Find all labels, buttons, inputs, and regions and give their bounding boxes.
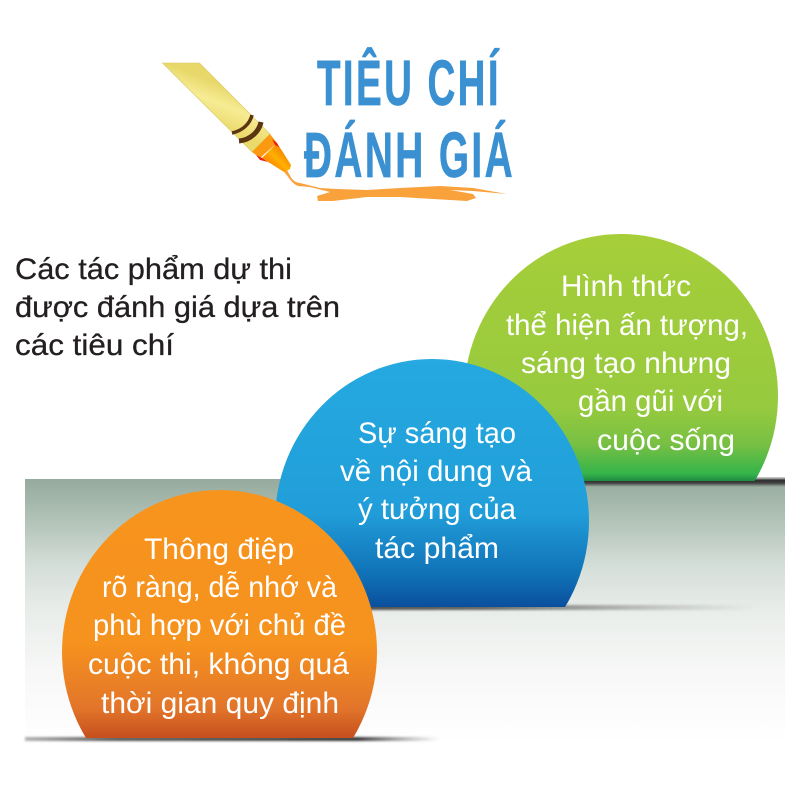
intro text: các tiêu chí [15, 329, 175, 362]
green criterion text: cuộc sống [597, 424, 735, 457]
blue criterion text: tác phẩm [375, 532, 499, 565]
orange criterion text: Thông điệp [144, 533, 294, 566]
green criterion text: Hình thức [561, 270, 691, 303]
orange criterion text: cuộc thi, không quá [88, 648, 349, 681]
orange ground shadow [25, 737, 440, 741]
blue criterion text: Sự sáng tạo [358, 417, 516, 450]
crayon tip red edges [256, 139, 279, 162]
green criterion text: sáng tạo nhưng [521, 347, 731, 380]
title: TIÊU CHÍ [317, 46, 501, 119]
green ground shadow [540, 477, 785, 487]
green criterion text: gần gũi với [578, 385, 723, 418]
crayon tip [262, 143, 291, 172]
green criterion text [506, 270, 748, 457]
blue ground shadow [300, 605, 755, 610]
icon: crayon with stroke [162, 63, 507, 201]
title [304, 46, 515, 191]
background band [25, 479, 785, 743]
panel: blue criterion [276, 359, 732, 612]
green half circle [467, 234, 778, 481]
crayon collar [252, 134, 277, 158]
green criterion text: thể hiện ấn tượng, [506, 309, 748, 342]
crayon body [162, 63, 270, 152]
crayon scribble [284, 170, 507, 201]
orange criterion text [88, 533, 349, 720]
orange half circle [62, 490, 377, 738]
title: ĐÁNH GIÁ [304, 119, 515, 191]
intro text: Các tác phẩm dự thi [15, 253, 292, 286]
blue criterion text [340, 417, 532, 565]
orange criterion text: phù hợp với chủ đề [93, 609, 346, 642]
intro text: được đánh giá dựa trên [15, 291, 340, 324]
blue criterion text: ý tưởng của [358, 493, 516, 526]
blue half circle [276, 359, 589, 607]
orange criterion text: rõ ràng, dễ nhớ và [102, 571, 337, 604]
panel: green criterion [467, 234, 785, 486]
panel: orange criterion [24, 490, 434, 743]
intro text [15, 253, 340, 362]
blue criterion text: về nội dung và [340, 455, 532, 488]
orange criterion text: thời gian quy định [101, 687, 339, 720]
crayon bands [232, 115, 252, 133]
